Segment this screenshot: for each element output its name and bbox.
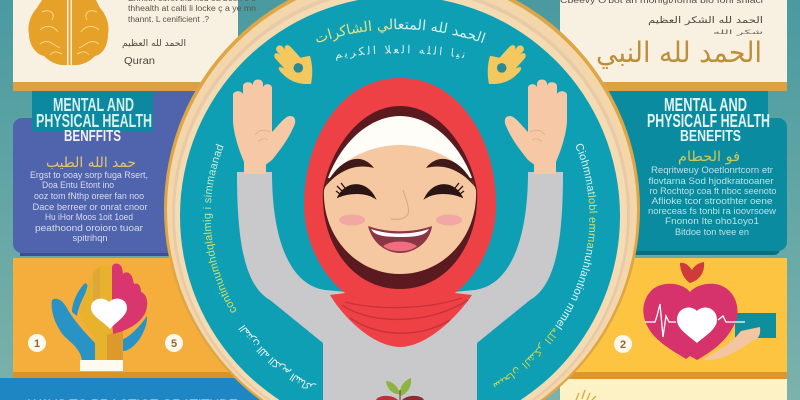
icon: gold hand right — [476, 34, 534, 94]
quote text: thhealth at calti li locke ç a ye mn — [128, 4, 256, 13]
panel: mental and physical health benefits right — [600, 91, 787, 255]
right hand — [505, 80, 567, 174]
inner scarf — [323, 106, 477, 289]
face — [324, 145, 476, 274]
panel: bottom right cream — [560, 379, 787, 400]
panel: mental and physical health benefits left — [13, 91, 203, 256]
panel: ways to practice gratitude — [0, 378, 270, 400]
curved ring text right: سبحان الشكر الله — [494, 328, 556, 388]
icon: brain — [28, 0, 109, 65]
curved ring text right: Ciohmmatlobl emmanuhlantion mmel — [555, 144, 598, 330]
curved ring text left — [202, 144, 316, 388]
body text: Ergst to ooay sorp fuga Rsert, — [30, 170, 148, 180]
panel: top left quote — [13, 0, 257, 91]
nose — [391, 190, 409, 219]
body text: Reqritweuy Ooetlonrtcorn etr — [651, 165, 773, 175]
body text: Aflioke tcor stroothter oene — [652, 196, 772, 206]
figure: woman in hijab raising hands — [233, 78, 567, 400]
quote source: Quran — [124, 56, 155, 67]
body text: Doa Entu Etont ino — [42, 180, 114, 190]
hijab folds — [342, 298, 468, 333]
body text: Hu iHor Moos 1oit 1oed — [45, 212, 133, 222]
panel: top right quote — [560, 0, 787, 91]
curved arabic heading: الحمد لله المتعالي الشاكرات — [316, 18, 486, 43]
badge 5: 5 — [171, 338, 177, 350]
heading: BENFFITS — [64, 128, 121, 145]
icon: hands holding heart — [52, 264, 147, 371]
large arabic calligraphy: الحمد لله النبي — [596, 36, 762, 69]
body and arms — [237, 172, 563, 400]
eyebrows — [325, 159, 475, 187]
arabic subheading: حمد الله الطيب — [46, 155, 136, 171]
badge 1: 1 — [34, 338, 40, 350]
curved arabic heading: نيا الله العلا الكريم — [336, 44, 464, 61]
cheeks — [339, 214, 462, 226]
icon: apple with leaves — [376, 378, 424, 400]
quote source arabic: الحمد لله العظيم — [122, 39, 186, 49]
icon: heart with heartbeat in hand — [643, 262, 776, 360]
badge 5 — [165, 334, 183, 352]
heading — [647, 95, 770, 145]
arabic line: الحمد لله الشكر العظيم — [648, 16, 763, 26]
small arabic line: شكر الله — [713, 29, 763, 36]
left hand — [233, 80, 295, 174]
curved ring text right — [494, 144, 598, 388]
curved arabic heading — [316, 18, 486, 61]
wooden ring — [164, 0, 640, 400]
arabic subheading: فو الحطام — [678, 149, 740, 165]
heading: MENTAL AND — [53, 95, 134, 115]
icon: gold hand left — [266, 34, 324, 94]
body text: noreceas fs tonbi ra ioovrsoew — [648, 206, 777, 216]
body text: peathoond oroioro tuoar — [35, 223, 143, 233]
body text: spitrihqn — [72, 233, 108, 243]
body text: ooz tom fNthp oreer fan noo — [34, 191, 144, 201]
quote text — [128, 0, 257, 24]
heading: PHYSICAL HEALTH — [36, 111, 152, 131]
icon: sun rays — [576, 390, 596, 400]
quote text: thannt. L cenificient .? — [128, 15, 210, 24]
badge 2 — [614, 335, 632, 353]
hijab — [304, 78, 496, 347]
body text: ro Rochtop coa ft nboc seenoto — [650, 186, 776, 196]
mouth — [368, 226, 432, 253]
body text: flovtarna Sod hjodkratooaner — [648, 176, 774, 186]
heading: BENEFITS — [680, 128, 741, 145]
curved ring text left: المتزن الله الكريم الشاكر — [238, 325, 316, 388]
body text: Bitdoe ton tvee en — [675, 227, 749, 237]
body text — [30, 170, 148, 243]
body text: Dace berreer or onrat cnoor — [32, 202, 148, 212]
badge 1 — [28, 334, 46, 352]
badge 2: 2 — [620, 339, 626, 351]
white under-scarf — [328, 116, 472, 178]
body text: Fnonon Ite oho1oyo1 — [665, 216, 759, 226]
heading — [36, 95, 152, 145]
eyes — [336, 183, 464, 198]
panel: yellow hands — [13, 258, 248, 379]
body text — [648, 165, 777, 237]
panel: yellow heart — [570, 258, 787, 379]
heading: MENTAL AND — [664, 95, 747, 115]
